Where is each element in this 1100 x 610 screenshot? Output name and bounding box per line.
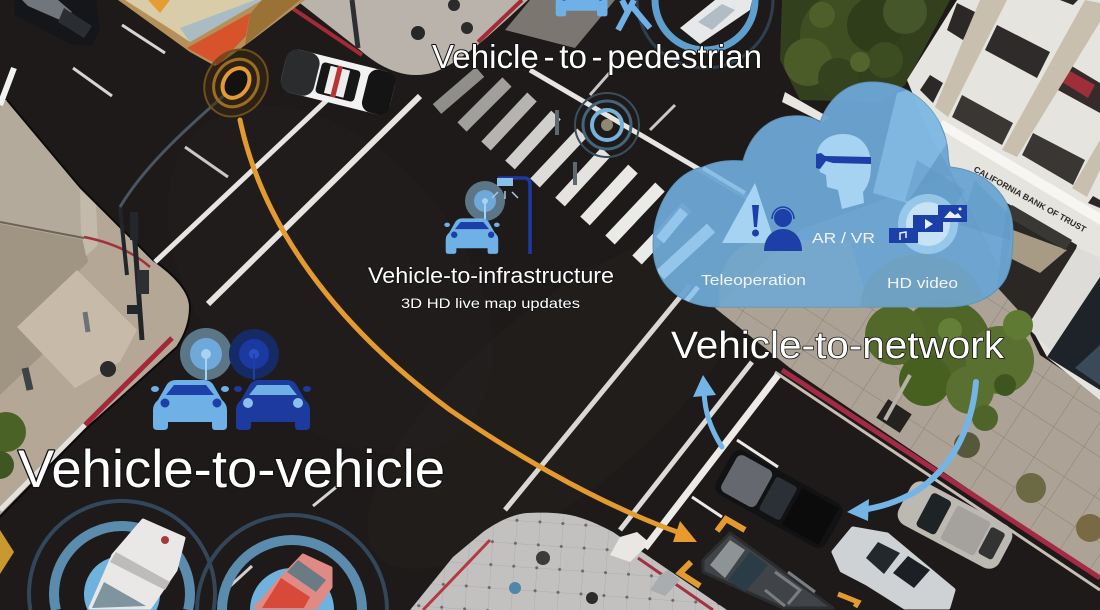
HD video label: HD video — [887, 275, 958, 292]
orange target bracket: left — [680, 562, 700, 586]
car: silver SUV — [834, 529, 953, 607]
heading: Vehicle-to-pedestrian: Vehicle - to - pedestrian — [432, 38, 762, 75]
sidewalk: right block — [715, 175, 1100, 590]
heading: Vehicle-to-vehicle: Vehicle-to-vehicle — [18, 440, 445, 499]
sidewalk: left corner — [0, 100, 190, 517]
tree: lower right — [865, 299, 1034, 431]
traffic beacon rings — [191, 37, 281, 129]
tree: upper — [780, 0, 950, 122]
sidewalk: top corner — [292, 0, 615, 75]
icon: V2I car with roadside signal and lamp post — [444, 178, 530, 254]
car: dark pickup truck — [703, 533, 833, 608]
icon: warning triangle — [722, 183, 775, 243]
signal rings around the red car — [197, 515, 387, 610]
car: silver minivan — [893, 477, 1017, 573]
pedestrian signal rings — [575, 93, 639, 157]
road markings — [0, 25, 778, 588]
car: white truck — [90, 520, 184, 608]
tree: left edge — [0, 412, 26, 479]
orange target bracket: right — [838, 594, 858, 607]
icon: V2P car — [556, 0, 608, 16]
car: black SUV — [712, 447, 846, 551]
icon: V2P pedestrian — [618, 0, 650, 30]
icon: head with VR visor — [816, 134, 871, 209]
blue arrow: downlink from network — [847, 382, 976, 521]
car: yellow taxi — [0, 530, 14, 574]
car: top left dark SUV — [14, 0, 100, 46]
sidewalk: bottom corner — [410, 513, 727, 610]
cloud interior reflections — [660, 85, 1010, 310]
building sign: CALIFORNIA BANK OF TRUST — [972, 164, 1089, 235]
signal rings around the white truck — [29, 501, 215, 610]
cloud: network services — [653, 82, 1013, 310]
street furniture and pedestrians — [25, 0, 575, 390]
heading: Vehicle-to-network: Vehicle-to-network — [671, 325, 1005, 367]
heading: Vehicle-to-infrastructure: Vehicle-to-infrastructure — [368, 263, 614, 288]
icon: V2V light-blue car with signal — [151, 328, 232, 430]
car: police cruiser — [278, 47, 398, 117]
building on the right — [907, 0, 1100, 400]
orange target bracket: upper — [717, 519, 745, 531]
cloud shape — [653, 82, 1013, 307]
planters — [954, 432, 1100, 542]
icon: HD video media tiles — [889, 194, 967, 254]
connection pole to traffic beacon — [120, 92, 228, 207]
caption: 3D HD live map updates: 3D HD live map updates — [401, 295, 580, 311]
road shading — [102, 43, 802, 610]
icon: V2V dark-blue car with signal — [229, 329, 311, 430]
Teleoperation label: Teleoperation — [701, 272, 806, 289]
blue arrow: uplink to network — [693, 375, 722, 447]
colourful corner building at top left — [118, 0, 305, 66]
orange arrow: vehicle-to-vehicle warning path — [240, 120, 697, 542]
AR / VR label: AR / VR — [812, 230, 875, 247]
car in rings at top — [637, 0, 773, 68]
car: red sedan — [255, 555, 331, 608]
icon: teleoperator with headset — [764, 207, 802, 251]
